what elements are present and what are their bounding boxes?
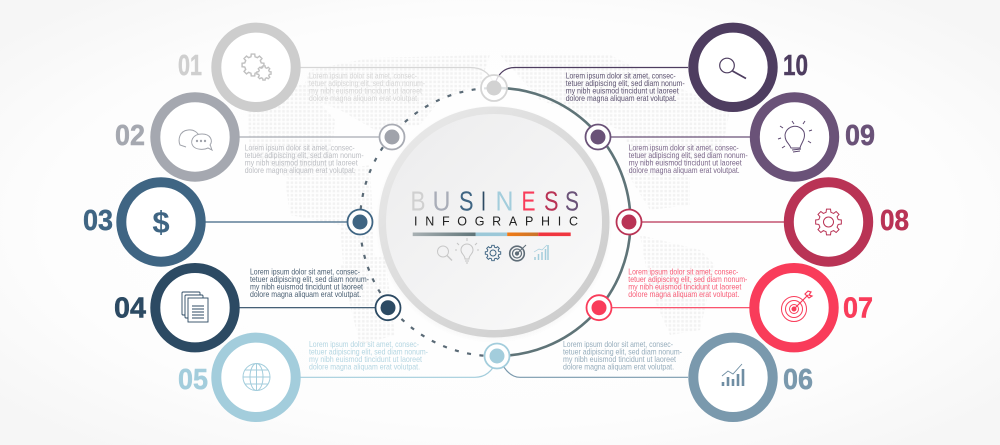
text 07 [628,268,748,299]
text 04: tetuer adipiscing elit, sed diam nonum- [250,275,369,284]
icon: target [782,291,812,322]
title: BUSINESS: B [410,186,426,217]
text 06: my nibh euismod tincidunt ut laoreet [563,355,677,364]
text 01: Lorem ipsum dolor sit amet, consec- [309,72,417,80]
node 01/10 [481,75,507,101]
number 03: 03 [83,205,113,237]
icon: gears [242,54,271,80]
icon: speech bubbles [179,130,212,150]
number 02: 02 [115,120,145,152]
text 02: my nibh euismod tincidunt ut laoreet [245,158,358,168]
text 06: tetuer adipiscing elit, sed diam nonum- [563,348,682,356]
text 02: Lorem ipsum dolor sit amet, consec- [245,144,355,152]
step 05 [178,338,428,417]
text 06: Lorem ipsum dolor sit amet, consec- [563,340,673,349]
node 02 [380,124,404,150]
icon: magnifier [720,58,746,78]
number 10: 10 [783,50,808,82]
text 02: dolore magna aliquam erat volutpat. [245,166,356,175]
text 07: Lorem ipsum dolor sit amet, consec- [628,268,739,276]
step 02 [115,97,364,177]
ring 01 [216,28,296,107]
text 05: dolore magna aliquam erat volutpat. [309,362,420,372]
text 09: my nibh euismod tincidunt ut laoreet [629,158,742,168]
icon: gear [816,209,841,235]
small icon: chart [534,245,548,260]
step 06 [563,338,813,417]
text 02 [245,144,364,175]
icon: bar chart [722,364,743,386]
text 09: dolore magna aliquam erat volutpat. [629,166,740,175]
text 02: tetuer adipiscing elit, sed diam nonum- [245,151,364,160]
step 03 [83,182,201,262]
node 09 [586,124,610,150]
step 01 [178,28,425,107]
step 10 [566,28,808,107]
subtitle: INFOGRAPHIC: INFOGRAPHIC [414,214,578,228]
dashed arc left [360,88,490,356]
text 10 [566,72,685,103]
text 06: dolore magna aliquam erat volutpat. [563,362,674,372]
node 04 [376,295,400,320]
ring 07 [754,268,834,347]
text 06 [563,340,682,372]
number 08: 08 [880,205,909,237]
step 07 [628,268,873,347]
text 07: my nibh euismod tincidunt ut laoreet [628,282,742,292]
ring 09 [755,97,834,177]
small icon: target [510,245,526,261]
title: BUSINESS: S [544,186,558,217]
text 10: dolore magna aliquam erat volutpat. [566,94,677,103]
text 05 [309,340,428,372]
node 03 [348,210,372,234]
text 09: Lorem ipsum dolor sit amet, consec- [629,144,739,152]
title: BUSINESS: U [432,186,450,217]
ring 08 [789,182,868,262]
icon: globe [243,364,270,390]
node 08 [616,210,642,234]
text 09: tetuer adipiscing elit, sed diam nonum- [629,151,748,160]
title: BUSINESS: E [522,186,536,217]
number 05: 05 [178,364,208,396]
text 07: tetuer adipiscing elit, sed diam nonum- [628,275,748,284]
ring 10 [693,28,773,107]
ring 06 [693,338,773,417]
title: BUSINESS: S [565,186,579,217]
icon: bulb [778,121,812,152]
text 05: my nibh euismod tincidunt ut laoreet [309,355,423,364]
central circle [375,105,613,343]
text 10: tetuer adipiscing elit, sed diam nonum- [566,79,685,88]
ring 02 [155,97,235,177]
text 10: Lorem ipsum dolor sit amet, consec- [566,72,676,80]
title: BUSINESS: S [459,186,474,217]
node 07 [586,295,612,320]
text 04: Lorem ipsum dolor sit amet, consec- [250,268,360,276]
ring 05 [216,338,296,417]
text 07: dolore magna aliquam erat volutpat. [628,290,739,299]
small icon: gear [485,245,501,261]
step 08 [789,182,909,262]
text 01 [309,72,425,103]
small icon: search [438,246,452,260]
text 09 [629,144,748,175]
icon: documents [182,292,208,322]
text 01: dolore magna aliquam erat volutpat. [309,94,419,103]
title: BUSINESS: I [481,186,486,217]
connector lines [205,68,785,377]
text 05: Lorem ipsum dolor sit amet, consec- [309,340,419,349]
text 01: tetuer adipiscing elit, sed diam nonum- [309,79,425,88]
text 05: tetuer adipiscing elit, sed diam nonum- [309,348,428,356]
text 04 [250,268,369,299]
colour bar [413,232,571,236]
title: BUSINESS [410,186,579,217]
text 04: dolore magna aliquam erat volutpat. [250,290,361,299]
step 04 [114,268,369,347]
small icon row [438,238,548,263]
node 05/06 [484,344,510,368]
icon: dollar: $ [152,204,170,240]
dotted world map [245,55,730,345]
number 09: 09 [845,120,875,152]
ring 03 [121,182,201,262]
nodes [348,75,642,368]
ring 04 [155,268,235,347]
small icon: bulb [455,238,479,263]
number 04: 04 [114,293,146,325]
number 07: 07 [843,293,873,325]
text 01: my nibh euismod tincidunt ut laoreet [309,86,423,96]
title: BUSINESS: N [496,186,514,217]
number 06: 06 [783,364,813,396]
step 09 [629,97,875,177]
solid arc right [496,88,631,356]
text 04: my nibh euismod tincidunt ut laoreet [250,282,364,292]
text 10: my nibh euismod tincidunt ut laoreet [566,86,679,96]
number 01: 01 [178,50,202,82]
